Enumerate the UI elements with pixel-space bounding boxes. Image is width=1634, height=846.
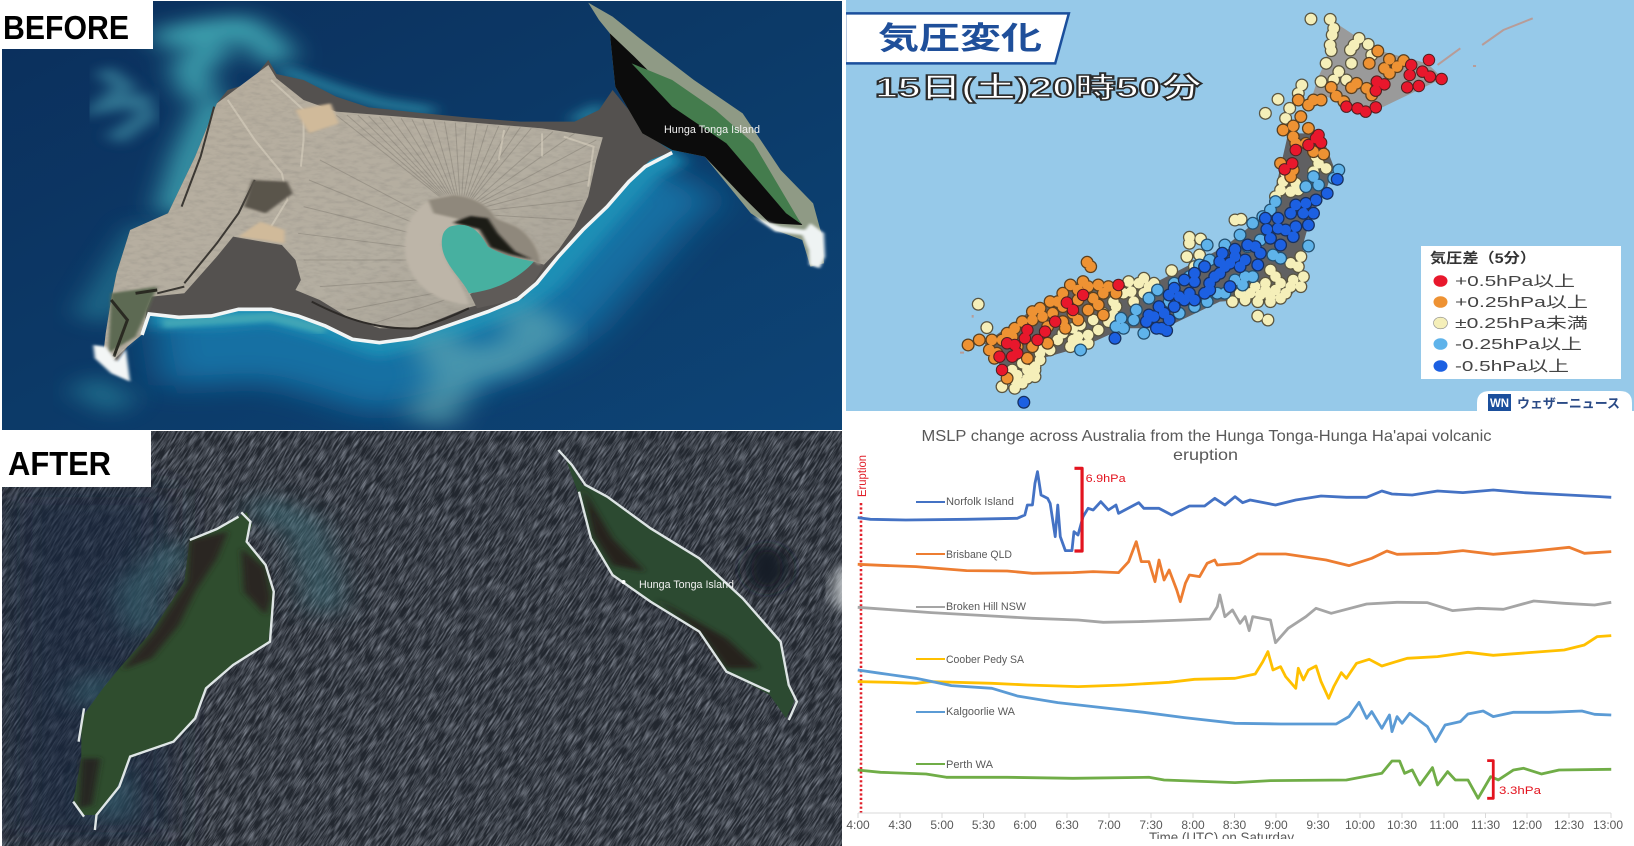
map legend: ±0.25hPa未満 <box>1455 315 1588 332</box>
bracket value: 6.9 hPa: 6.9hPa <box>1086 473 1127 485</box>
surf along the south shore <box>142 153 672 343</box>
time axis: 9:30 <box>1306 818 1330 832</box>
pressure dots: +0.5 hPa or more <box>1000 60 1442 370</box>
time axis: 12:00 <box>1512 818 1542 832</box>
cloud at edge <box>826 560 842 617</box>
island label: Hunga Tonga Island <box>664 124 760 136</box>
time axis: 5:00 <box>930 818 954 832</box>
Weathernews logo <box>1477 391 1632 411</box>
green southwest peninsula <box>108 287 157 353</box>
map title box <box>845 13 1069 63</box>
time axis: 10:00 <box>1345 818 1375 832</box>
time axis: 6:30 <box>1055 818 1079 832</box>
panel: Japan pressure change map <box>845 0 1634 411</box>
bracket: 3.3 hPa <box>1487 761 1493 798</box>
time axis: 7:30 <box>1139 818 1163 832</box>
series legend labels: Norfolk Island <box>946 496 1014 508</box>
land: Honshu, Shikoku, Kyushu <box>984 133 1334 380</box>
series: Brisbane QLD <box>858 542 1611 602</box>
map title: 気圧変化 <box>878 21 1042 56</box>
time axis: 13:00 <box>1593 818 1623 832</box>
map timestamp: 15日(土)20時50分 <box>875 72 1202 103</box>
pressure dots: within ±0.25 hPa <box>978 19 1372 388</box>
map legend: -0.25hPa以上 <box>1455 336 1582 353</box>
label: before <box>0 0 153 49</box>
map legend: +0.25hPa以上 <box>1455 294 1588 311</box>
series legend labels: Brisbane QLD <box>946 549 1012 561</box>
radial gullies on the cone <box>298 115 596 323</box>
series legend labels: Broken Hill NSW <box>946 601 1027 613</box>
series legend labels: Kalgoorlie WA <box>946 706 1016 718</box>
time axis: 9:00 <box>1264 818 1288 832</box>
crater shadow <box>453 216 542 264</box>
island label: Hunga Tonga Island <box>639 579 734 591</box>
chart title: MSLP change across Australia from the Hunga Tonga-Hunga Ha'apai volcanic <box>922 428 1492 445</box>
chart title: eruption <box>1173 447 1238 464</box>
time axis: 6:00 <box>1013 818 1037 832</box>
label: before: BEFORE <box>3 9 129 46</box>
upper right island <box>588 3 824 267</box>
lower dark shore band <box>312 302 469 328</box>
left island <box>73 512 274 830</box>
main island: tan cone and ridge <box>103 65 603 360</box>
series: Broken Hill NSW <box>858 595 1611 643</box>
pressure dots: -0.5 hPa or more <box>1024 179 1337 402</box>
pressure dots: +0.25 hPa or more <box>968 51 1404 378</box>
series legend labels: Perth WA <box>946 759 994 771</box>
series: Norfolk Island <box>858 472 1611 551</box>
right island <box>558 450 797 720</box>
pressure dots: -0.25 hPa or more <box>1081 170 1339 350</box>
land: Hokkaido <box>1313 26 1438 108</box>
time axis: 4:30 <box>888 818 912 832</box>
map legend: +0.5hPa以上 <box>1455 273 1575 290</box>
time axis: 5:30 <box>972 818 996 832</box>
Weathernews logo: WN <box>1490 396 1509 410</box>
dark sand by the lake <box>470 262 545 308</box>
map legend: 気圧差（5分） <box>1430 250 1536 266</box>
turquoise plume at north-west <box>157 27 276 213</box>
bracket value: 3.3 hPa: 3.3hPa <box>1499 785 1542 797</box>
shadow of cloud <box>745 545 789 592</box>
main island: dark sand base <box>103 60 672 363</box>
crater rim <box>405 195 540 305</box>
time axis: 11:00 <box>1429 818 1459 832</box>
series legend labels: Coober Pedy SA <box>946 654 1025 666</box>
Weathernews logo: ウェザーニュース <box>1517 396 1620 411</box>
time axis: 8:00 <box>1181 818 1205 832</box>
chart title <box>922 428 1492 464</box>
series: Kalgoorlie WA <box>858 670 1611 742</box>
series: Coober Pedy SA <box>858 636 1611 698</box>
time axis: 4:00 <box>846 818 870 832</box>
time axis: 10:30 <box>1387 818 1417 832</box>
time axis: 12:30 <box>1554 818 1584 832</box>
surf at south-west tip <box>90 342 134 383</box>
time axis: 7:00 <box>1097 818 1121 832</box>
map legend: -0.5hPa以上 <box>1455 358 1569 375</box>
time axis: 11:30 <box>1471 818 1500 832</box>
western ridge detail <box>157 107 255 293</box>
time axis: 8:30 <box>1223 818 1247 832</box>
eruption marker: Eruption <box>855 455 869 497</box>
series: Perth WA <box>858 761 1611 798</box>
Kuril islands <box>960 18 1533 353</box>
crater lake <box>442 225 534 293</box>
panel: after satellite image <box>2 431 865 846</box>
bracket: 6.9 hPa <box>1074 468 1082 551</box>
panel: before satellite image <box>2 1 842 430</box>
surf at south-east tip of upper island <box>754 217 825 268</box>
time axis title: Time (UTC) on Saturday <box>1149 829 1294 845</box>
label: after: AFTER <box>8 445 111 482</box>
panel: MSLP chart <box>846 420 1634 845</box>
label: after <box>2 431 151 487</box>
time axis <box>846 813 1623 832</box>
map legend <box>1421 246 1621 379</box>
series legend labels <box>916 496 1027 771</box>
